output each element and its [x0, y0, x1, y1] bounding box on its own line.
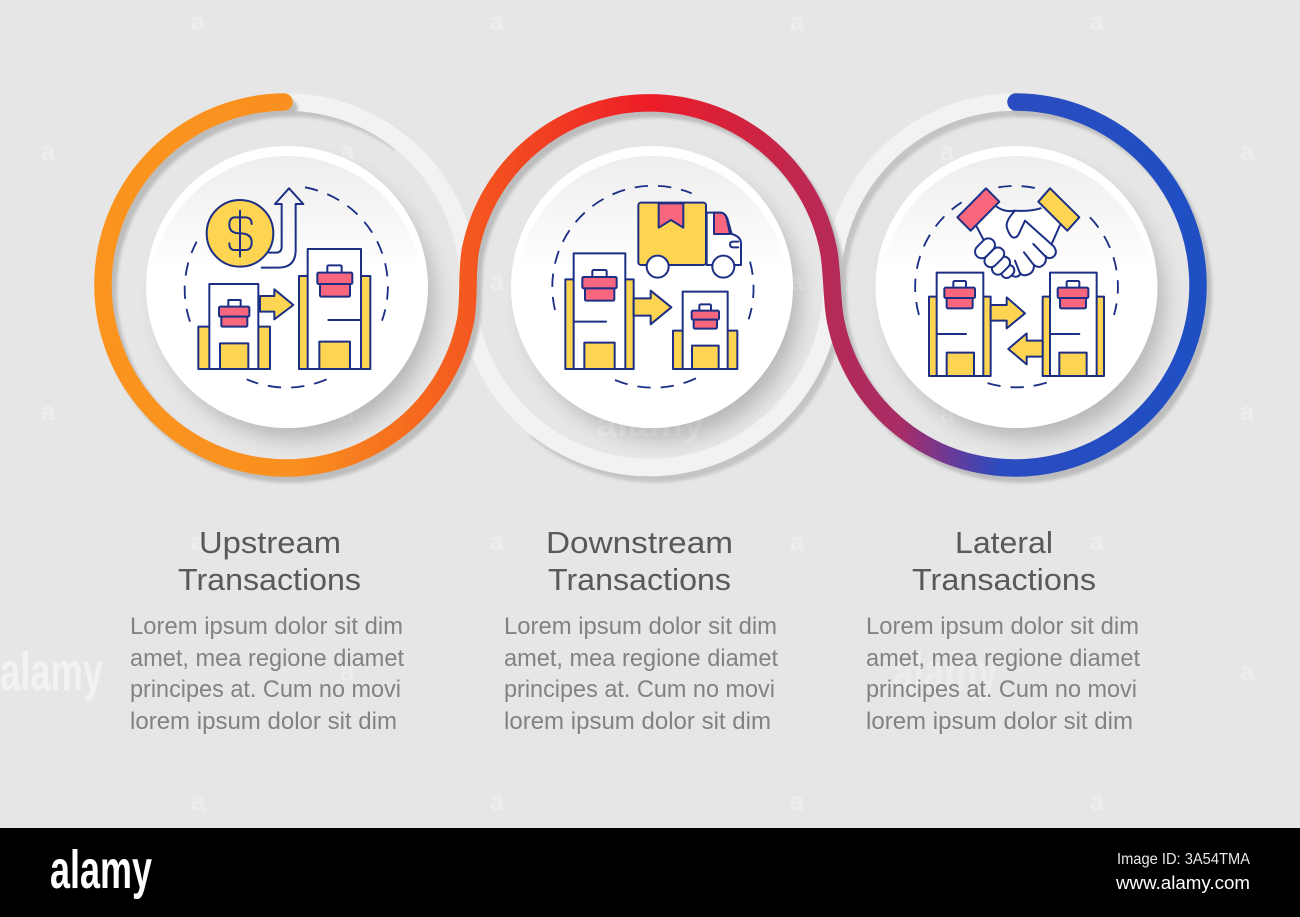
heading: upstream transactions [178, 525, 361, 597]
watermark pattern: a [191, 786, 206, 816]
watermark pattern: alamy [596, 406, 704, 444]
watermark pattern: a [640, 136, 655, 166]
text: upstream description: principes at. Cum no movi [130, 676, 401, 703]
heading: lateral transactions: Lateral [955, 525, 1053, 560]
heading: upstream transactions: Upstream [199, 525, 341, 560]
footer bar: www.alamy.com [1115, 873, 1250, 893]
watermark pattern: a [41, 396, 56, 426]
text: upstream description [130, 613, 404, 735]
watermark pattern: a [1090, 526, 1105, 556]
watermark pattern: a [790, 6, 805, 36]
watermark pattern: a [1240, 136, 1255, 166]
text: downstream description: amet, mea regione diamet [504, 645, 778, 672]
disc 2 [511, 146, 800, 439]
text: lateral description [866, 613, 1140, 735]
icon: lateral transactions [915, 186, 1118, 387]
text: upstream description: lorem ipsum dolor sit dim [130, 708, 397, 735]
text: upstream description: amet, mea regione diamet [130, 645, 404, 672]
watermark pattern: alamy [893, 642, 998, 702]
text: upstream description: Lorem ipsum dolor sit dim [130, 613, 403, 640]
watermark pattern: a [790, 266, 805, 296]
heading: downstream transactions: Downstream [546, 525, 733, 560]
watermark pattern: a [191, 6, 206, 36]
watermark pattern: a [1090, 6, 1105, 36]
watermark pattern: a [340, 656, 355, 686]
watermark pattern: a [490, 526, 505, 556]
heading: upstream transactions: Transactions [178, 562, 361, 597]
watermark pattern: alamy [0, 642, 103, 702]
footer bar [0, 828, 1300, 917]
watermark pattern: a [1240, 656, 1255, 686]
heading: downstream transactions [546, 525, 733, 597]
text: lateral description: Lorem ipsum dolor sit dim [866, 613, 1139, 640]
text: downstream description: Lorem ipsum dolor sit dim [504, 613, 777, 640]
footer bar: Image ID: 3A54TMA [1117, 851, 1250, 868]
text: lateral description: amet, mea regione diamet [866, 645, 1140, 672]
footer bar: alamy [50, 840, 152, 900]
watermark pattern: a [1240, 396, 1255, 426]
icon: downstream transactions [552, 186, 754, 388]
heading: lateral transactions [912, 525, 1096, 597]
gradient flow ring [103, 102, 1203, 474]
watermark pattern: a [490, 786, 505, 816]
watermark pattern: a [790, 526, 805, 556]
text: downstream description [504, 613, 778, 735]
icon: upstream transactions [185, 187, 388, 388]
watermark pattern: a [940, 136, 955, 166]
text: downstream description: principes at. Cum no movi [504, 676, 775, 703]
heading: lateral transactions: Transactions [912, 562, 1096, 597]
watermark pattern: a [340, 398, 355, 428]
watermark pattern: a [790, 786, 805, 816]
heading: downstream transactions: Transactions [548, 562, 731, 597]
pale connector ring [286, 102, 1020, 474]
watermark pattern: a [41, 136, 56, 166]
watermark pattern: a [940, 398, 955, 428]
watermark pattern: a [340, 136, 355, 166]
disc 3 [876, 146, 1164, 439]
disc 1 [146, 146, 435, 439]
watermark pattern: a [1090, 786, 1105, 816]
text: downstream description: lorem ipsum dolor sit dim [504, 708, 771, 735]
watermark pattern: a [490, 266, 505, 296]
text: lateral description: lorem ipsum dolor sit dim [866, 708, 1133, 735]
watermark pattern: a [490, 6, 505, 36]
text: lateral description: principes at. Cum no movi [866, 676, 1137, 703]
watermark pattern: a [191, 526, 206, 556]
